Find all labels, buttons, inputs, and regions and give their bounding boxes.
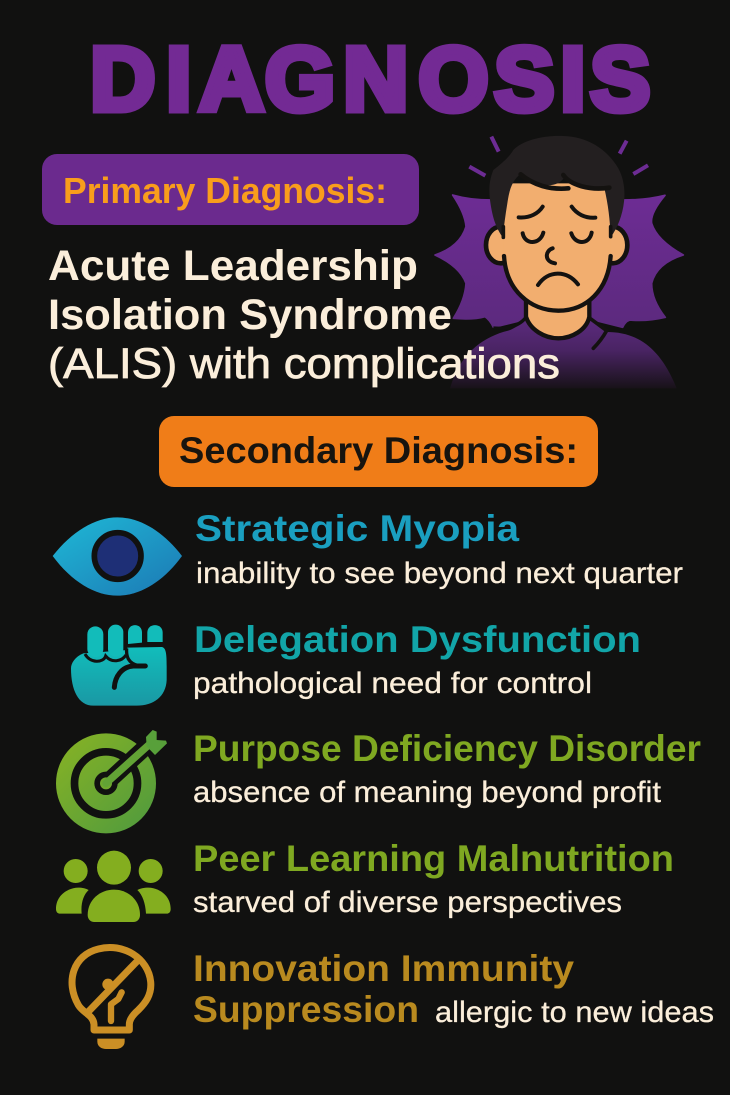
item: purpose deficiency disorder: Purpose Deficiency Disorder — [193, 728, 701, 769]
item: strategic myopia: inability to see beyond next quarter — [196, 557, 683, 590]
primary diagnosis text — [48, 242, 560, 388]
panel: secondary diagnosis label: Secondary Diagnosis: — [179, 430, 578, 471]
primary diagnosis text: Isolation Syndrome — [48, 291, 452, 339]
stress marks — [469, 137, 648, 176]
icon: eye — [53, 517, 182, 596]
item: delegation dysfunction: pathological need for control — [193, 667, 592, 700]
item: innovation immunity suppression: Innovation Immunity — [193, 948, 574, 989]
item: peer learning malnutrition: starved of diverse perspectives — [193, 886, 622, 919]
shoulders — [450, 318, 677, 388]
item: innovation immunity suppression — [193, 948, 714, 1030]
face — [504, 183, 611, 311]
neck — [526, 302, 589, 338]
primary diagnosis text: (ALIS) with complications — [48, 340, 560, 388]
item: delegation dysfunction: Delegation Dysfunction — [194, 619, 641, 660]
icon: fist — [71, 625, 167, 706]
icon: people — [56, 851, 171, 922]
item: innovation immunity suppression: allergic to new ideas — [435, 996, 714, 1029]
icon: target with arrow — [63, 730, 167, 826]
panel: primary diagnosis label: Primary Diagnosis: — [63, 170, 387, 211]
item: purpose deficiency disorder: absence of meaning beyond profit — [193, 776, 662, 809]
ears — [486, 227, 515, 263]
illustration: stressed person — [435, 136, 683, 388]
item: strategic myopia — [195, 508, 683, 590]
item: peer learning malnutrition — [193, 838, 674, 919]
item: innovation immunity suppression: Suppression — [193, 989, 419, 1030]
item: strategic myopia: Strategic Myopia — [195, 508, 519, 549]
primary diagnosis text: Acute Leadership — [48, 242, 418, 290]
icon: crossed-out light bulb — [72, 947, 151, 1049]
panel: primary diagnosis label — [42, 154, 419, 225]
facial features — [519, 207, 595, 285]
panel: secondary diagnosis label — [159, 416, 598, 487]
item: purpose deficiency disorder — [193, 728, 701, 809]
burst — [435, 195, 683, 327]
hair — [489, 136, 624, 237]
item: peer learning malnutrition: Peer Learning Malnutrition — [193, 838, 674, 879]
item: delegation dysfunction — [193, 619, 641, 700]
title: DIAGNOSIS — [90, 30, 650, 130]
